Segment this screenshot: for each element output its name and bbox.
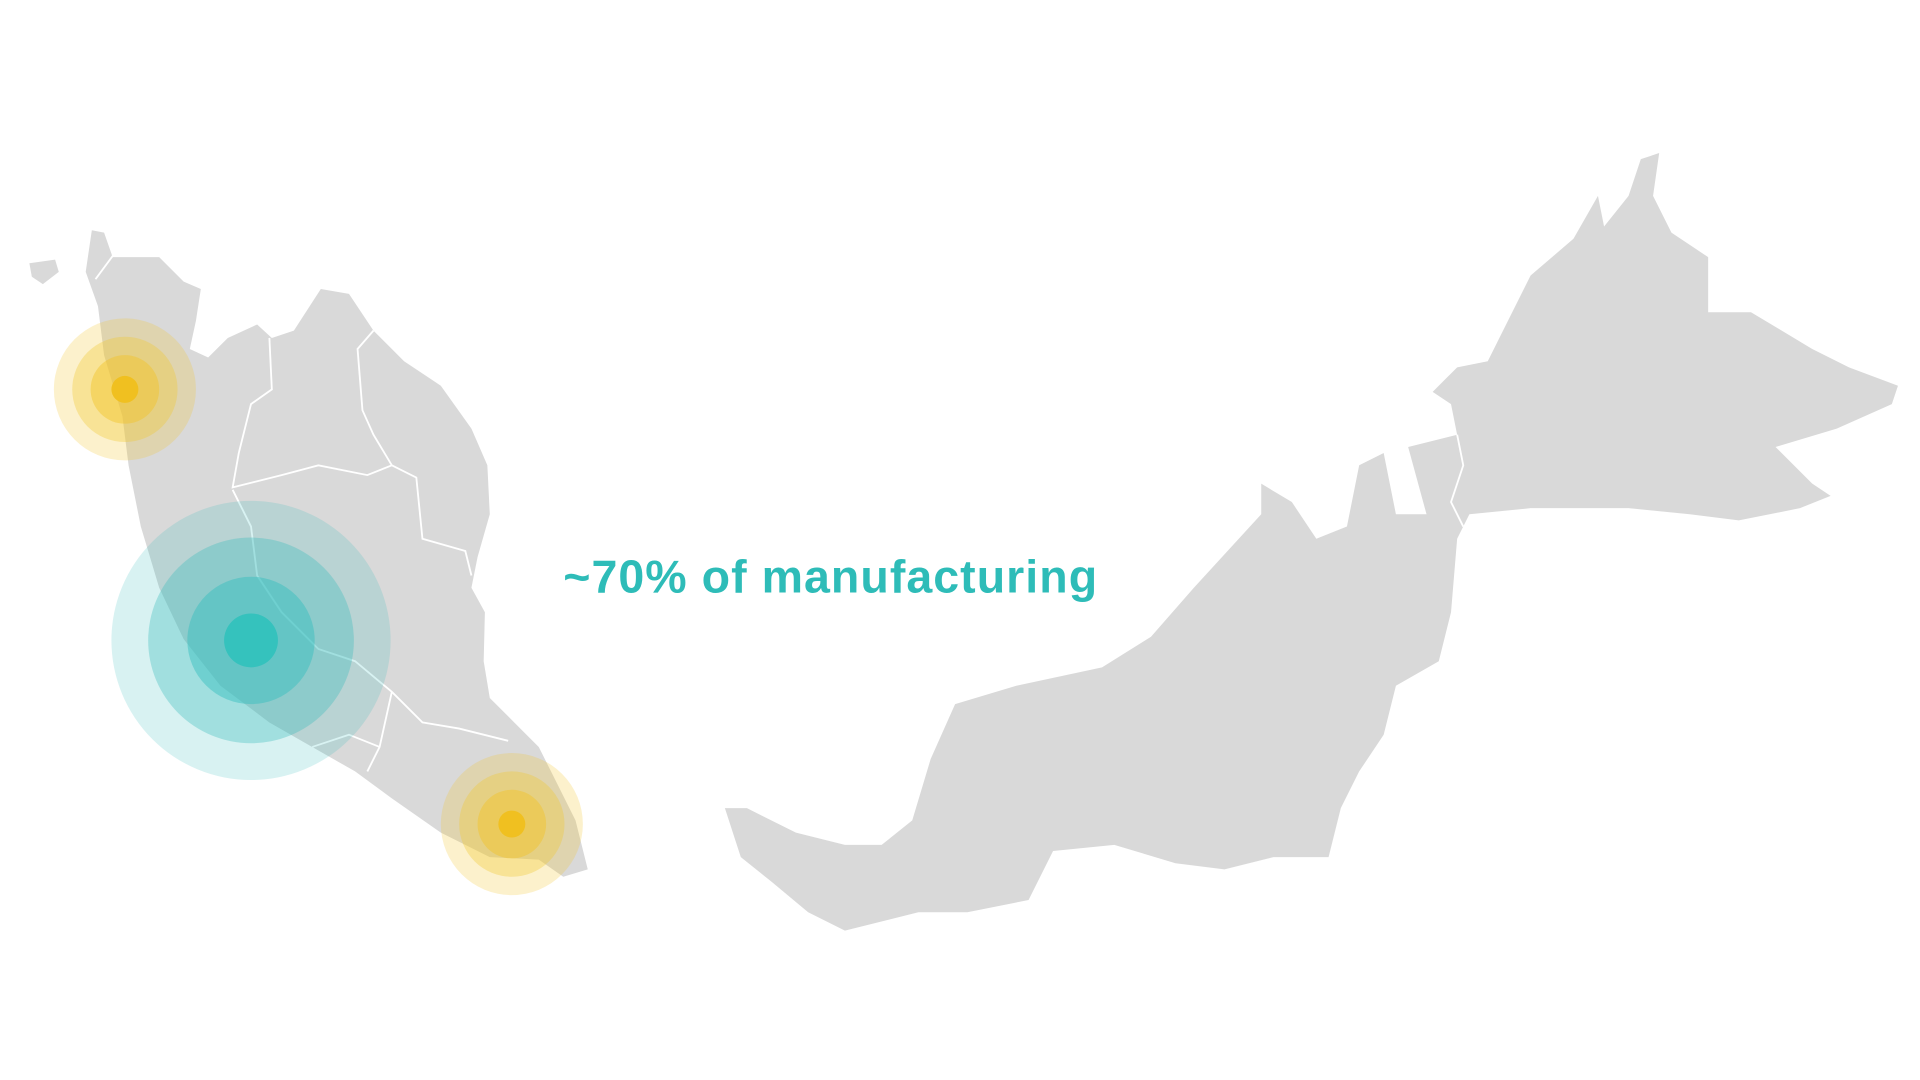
map: peninsular malaysia [29, 230, 588, 877]
marker: northern yellow [54, 318, 196, 460]
marker: central teal [111, 501, 391, 780]
map: east malaysia [725, 153, 1898, 931]
marker: southern yellow [441, 753, 583, 895]
label: manufacturing share: ~70% of manufacturing [563, 551, 1097, 603]
